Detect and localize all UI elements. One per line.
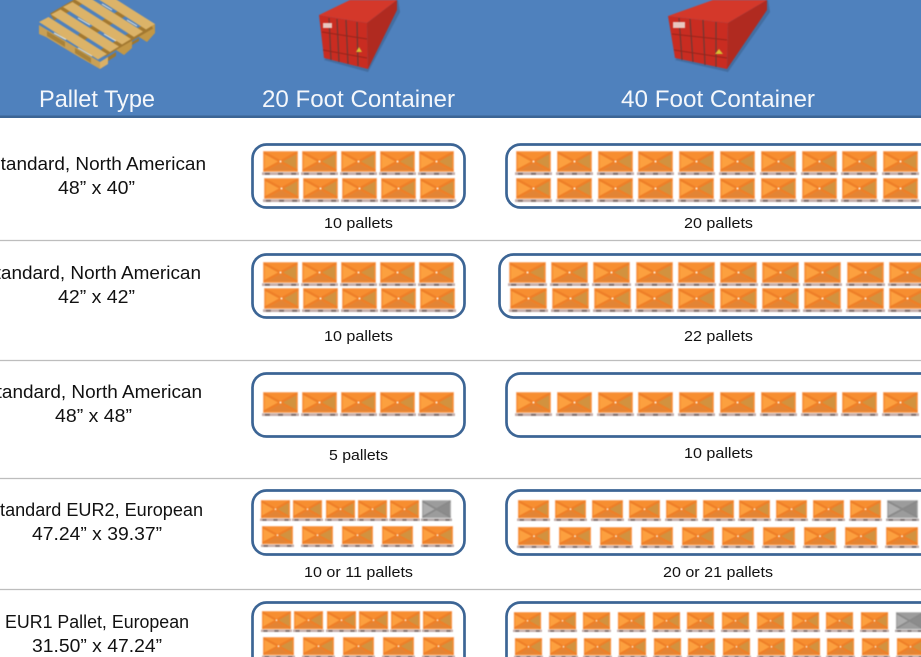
row 3: 40 foot layout	[506, 374, 921, 436]
row 3: 40 foot count: 10 pallets	[684, 445, 753, 462]
icon: wooden pallet	[39, 0, 155, 69]
row 4: 40 foot count: 20 or 21 pallets	[663, 564, 773, 581]
row 4: 20 foot layout	[252, 490, 464, 554]
row 1 pallet type text: 48” x 40”	[58, 178, 135, 198]
row 4: 20 foot count: 10 or 11 pallets	[304, 564, 413, 581]
row 2: 40 foot count: 22 pallets	[684, 328, 753, 345]
heading: 40 foot container: 40 Foot Container	[621, 86, 815, 113]
row 5 pallet type text: EUR1 Pallet, European	[5, 612, 189, 632]
heading: pallet type: Pallet Type	[39, 86, 155, 113]
heading: 20 foot container: 20 Foot Container	[262, 86, 455, 113]
row 2 pallet type text: 42” x 42”	[58, 287, 135, 307]
row 4: 40 foot layout	[506, 490, 921, 554]
row 5 pallet type text: 31.50” x 47.24”	[32, 636, 162, 656]
row 4 pallet type text: 47.24” x 39.37”	[32, 524, 162, 544]
row 3: 20 foot count: 5 pallets	[329, 447, 388, 464]
row 2: 40 foot layout	[500, 254, 921, 318]
row 4 pallet type text	[0, 500, 203, 544]
row 1: 40 foot count: 20 pallets	[684, 215, 753, 232]
row 5 pallet type text	[5, 612, 189, 656]
row 5: 20 foot layout	[252, 602, 464, 657]
header band	[0, 0, 921, 118]
row 2 pallet type text	[0, 263, 201, 307]
row 3 pallet type text: 48” x 48”	[55, 406, 132, 426]
row 3: 20 foot layout	[252, 374, 464, 436]
row 1: 40 foot layout	[506, 144, 921, 208]
row 2: 20 foot layout	[252, 254, 464, 318]
icon: 40 foot container	[668, 0, 770, 72]
row 2: 20 foot count: 10 pallets	[324, 328, 393, 345]
icon: 20 foot container	[319, 0, 400, 72]
row 3 pallet type text	[0, 382, 202, 426]
row 1 pallet type text	[0, 154, 206, 198]
row 1: 20 foot count: 10 pallets	[324, 215, 393, 232]
row 1: 20 foot layout	[252, 144, 464, 208]
row 5: 40 foot layout	[506, 602, 921, 657]
